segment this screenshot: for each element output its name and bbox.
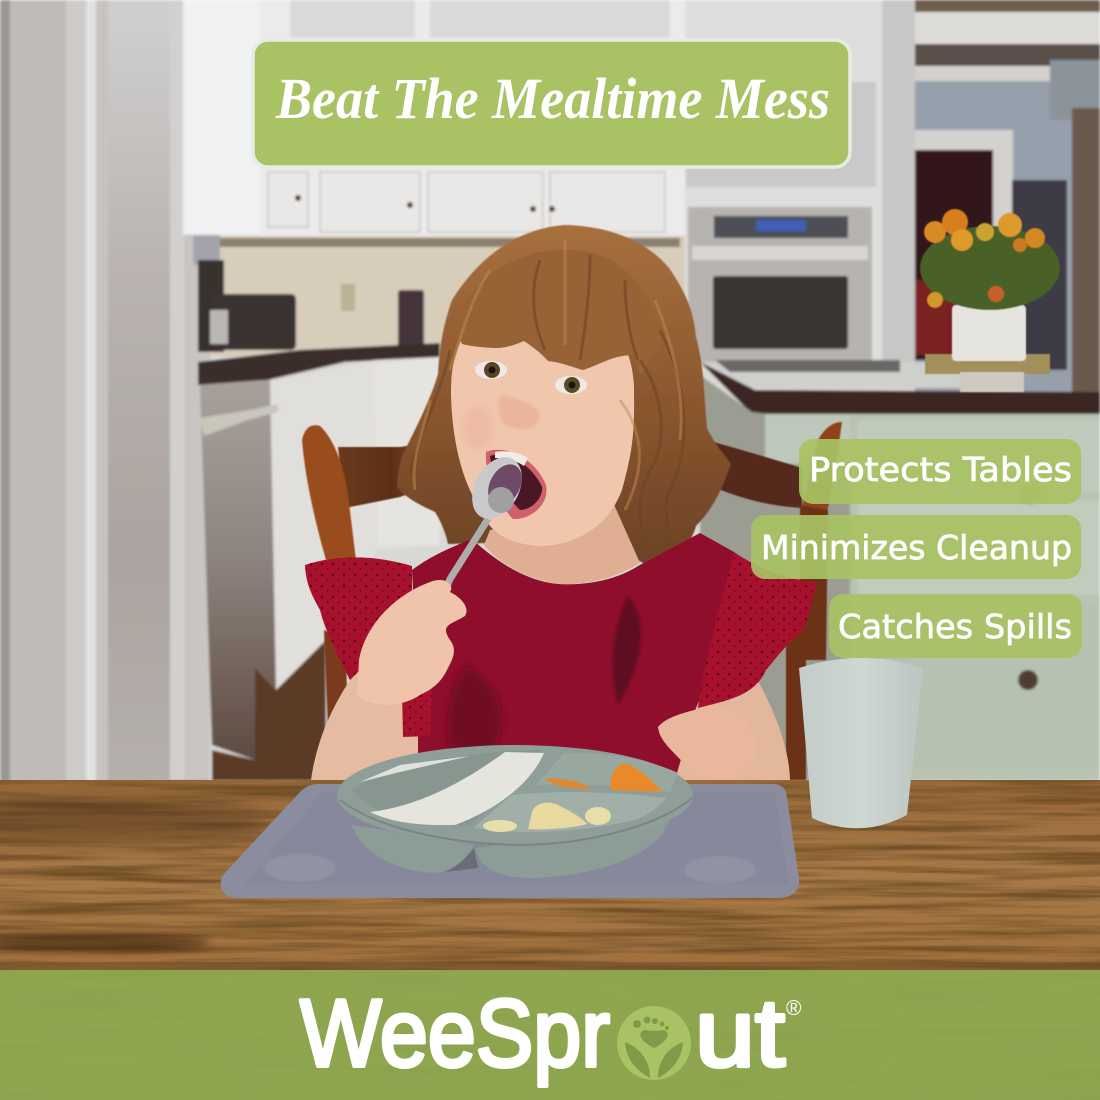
sleeve right [698, 552, 817, 708]
rim [337, 745, 693, 845]
nose [499, 395, 540, 429]
face [451, 295, 634, 546]
label: minimizes cleanup: Minimizes Cleanup [761, 528, 1072, 567]
title banner [253, 40, 850, 167]
yogurt [370, 752, 544, 825]
neck [484, 500, 640, 584]
label: catches spills [829, 594, 1082, 658]
logo: WeeSprout [300, 980, 802, 1087]
tile wall [210, 236, 685, 356]
lower right cabinets [700, 375, 1100, 780]
stove and right counter [700, 360, 1100, 414]
hair back [397, 225, 731, 564]
compartment top right [536, 753, 678, 792]
fruit [483, 764, 662, 832]
upper cabinets [183, 0, 685, 244]
arms [311, 650, 420, 782]
hair strands [410, 255, 684, 555]
cup [799, 658, 923, 828]
hand left [357, 580, 467, 705]
spoon [431, 449, 532, 624]
fringe [452, 250, 660, 375]
compartment left [352, 750, 540, 826]
chair [302, 422, 842, 780]
bowl lobes [352, 825, 474, 873]
lower left counter and cabinets [198, 343, 440, 781]
wooden table [0, 780, 1100, 970]
kitchen background photo [0, 0, 1100, 800]
sleeve left [305, 557, 412, 680]
oven [685, 0, 915, 362]
cheek shade [464, 406, 492, 450]
logo: WeeSprout: WeeSpr [300, 980, 610, 1087]
mouth [486, 450, 547, 519]
icon: sprout footprint [617, 1006, 691, 1080]
appliances on counter [193, 235, 424, 352]
red dress [412, 533, 734, 790]
right wall and door [915, 0, 1100, 400]
divided plate [337, 745, 693, 878]
logo: WeeSprout: ut [695, 980, 785, 1087]
registered mark: ® [786, 997, 802, 1020]
eyes [475, 361, 587, 394]
title text: Beat The Mealtime Mess [275, 66, 830, 131]
label: protects tables: Protects Tables [809, 450, 1072, 489]
child [305, 225, 817, 790]
label: protects tables [799, 439, 1081, 504]
compartment bottom right [473, 792, 666, 832]
label: minimizes cleanup [751, 515, 1081, 579]
hand right [658, 706, 756, 782]
label: catches spills: Catches Spills [838, 607, 1072, 646]
silicone placemat [221, 784, 799, 898]
lace piece [402, 686, 432, 737]
fridge [0, 0, 210, 790]
flowers in white vase [920, 209, 1060, 392]
footer band [0, 970, 1100, 1100]
